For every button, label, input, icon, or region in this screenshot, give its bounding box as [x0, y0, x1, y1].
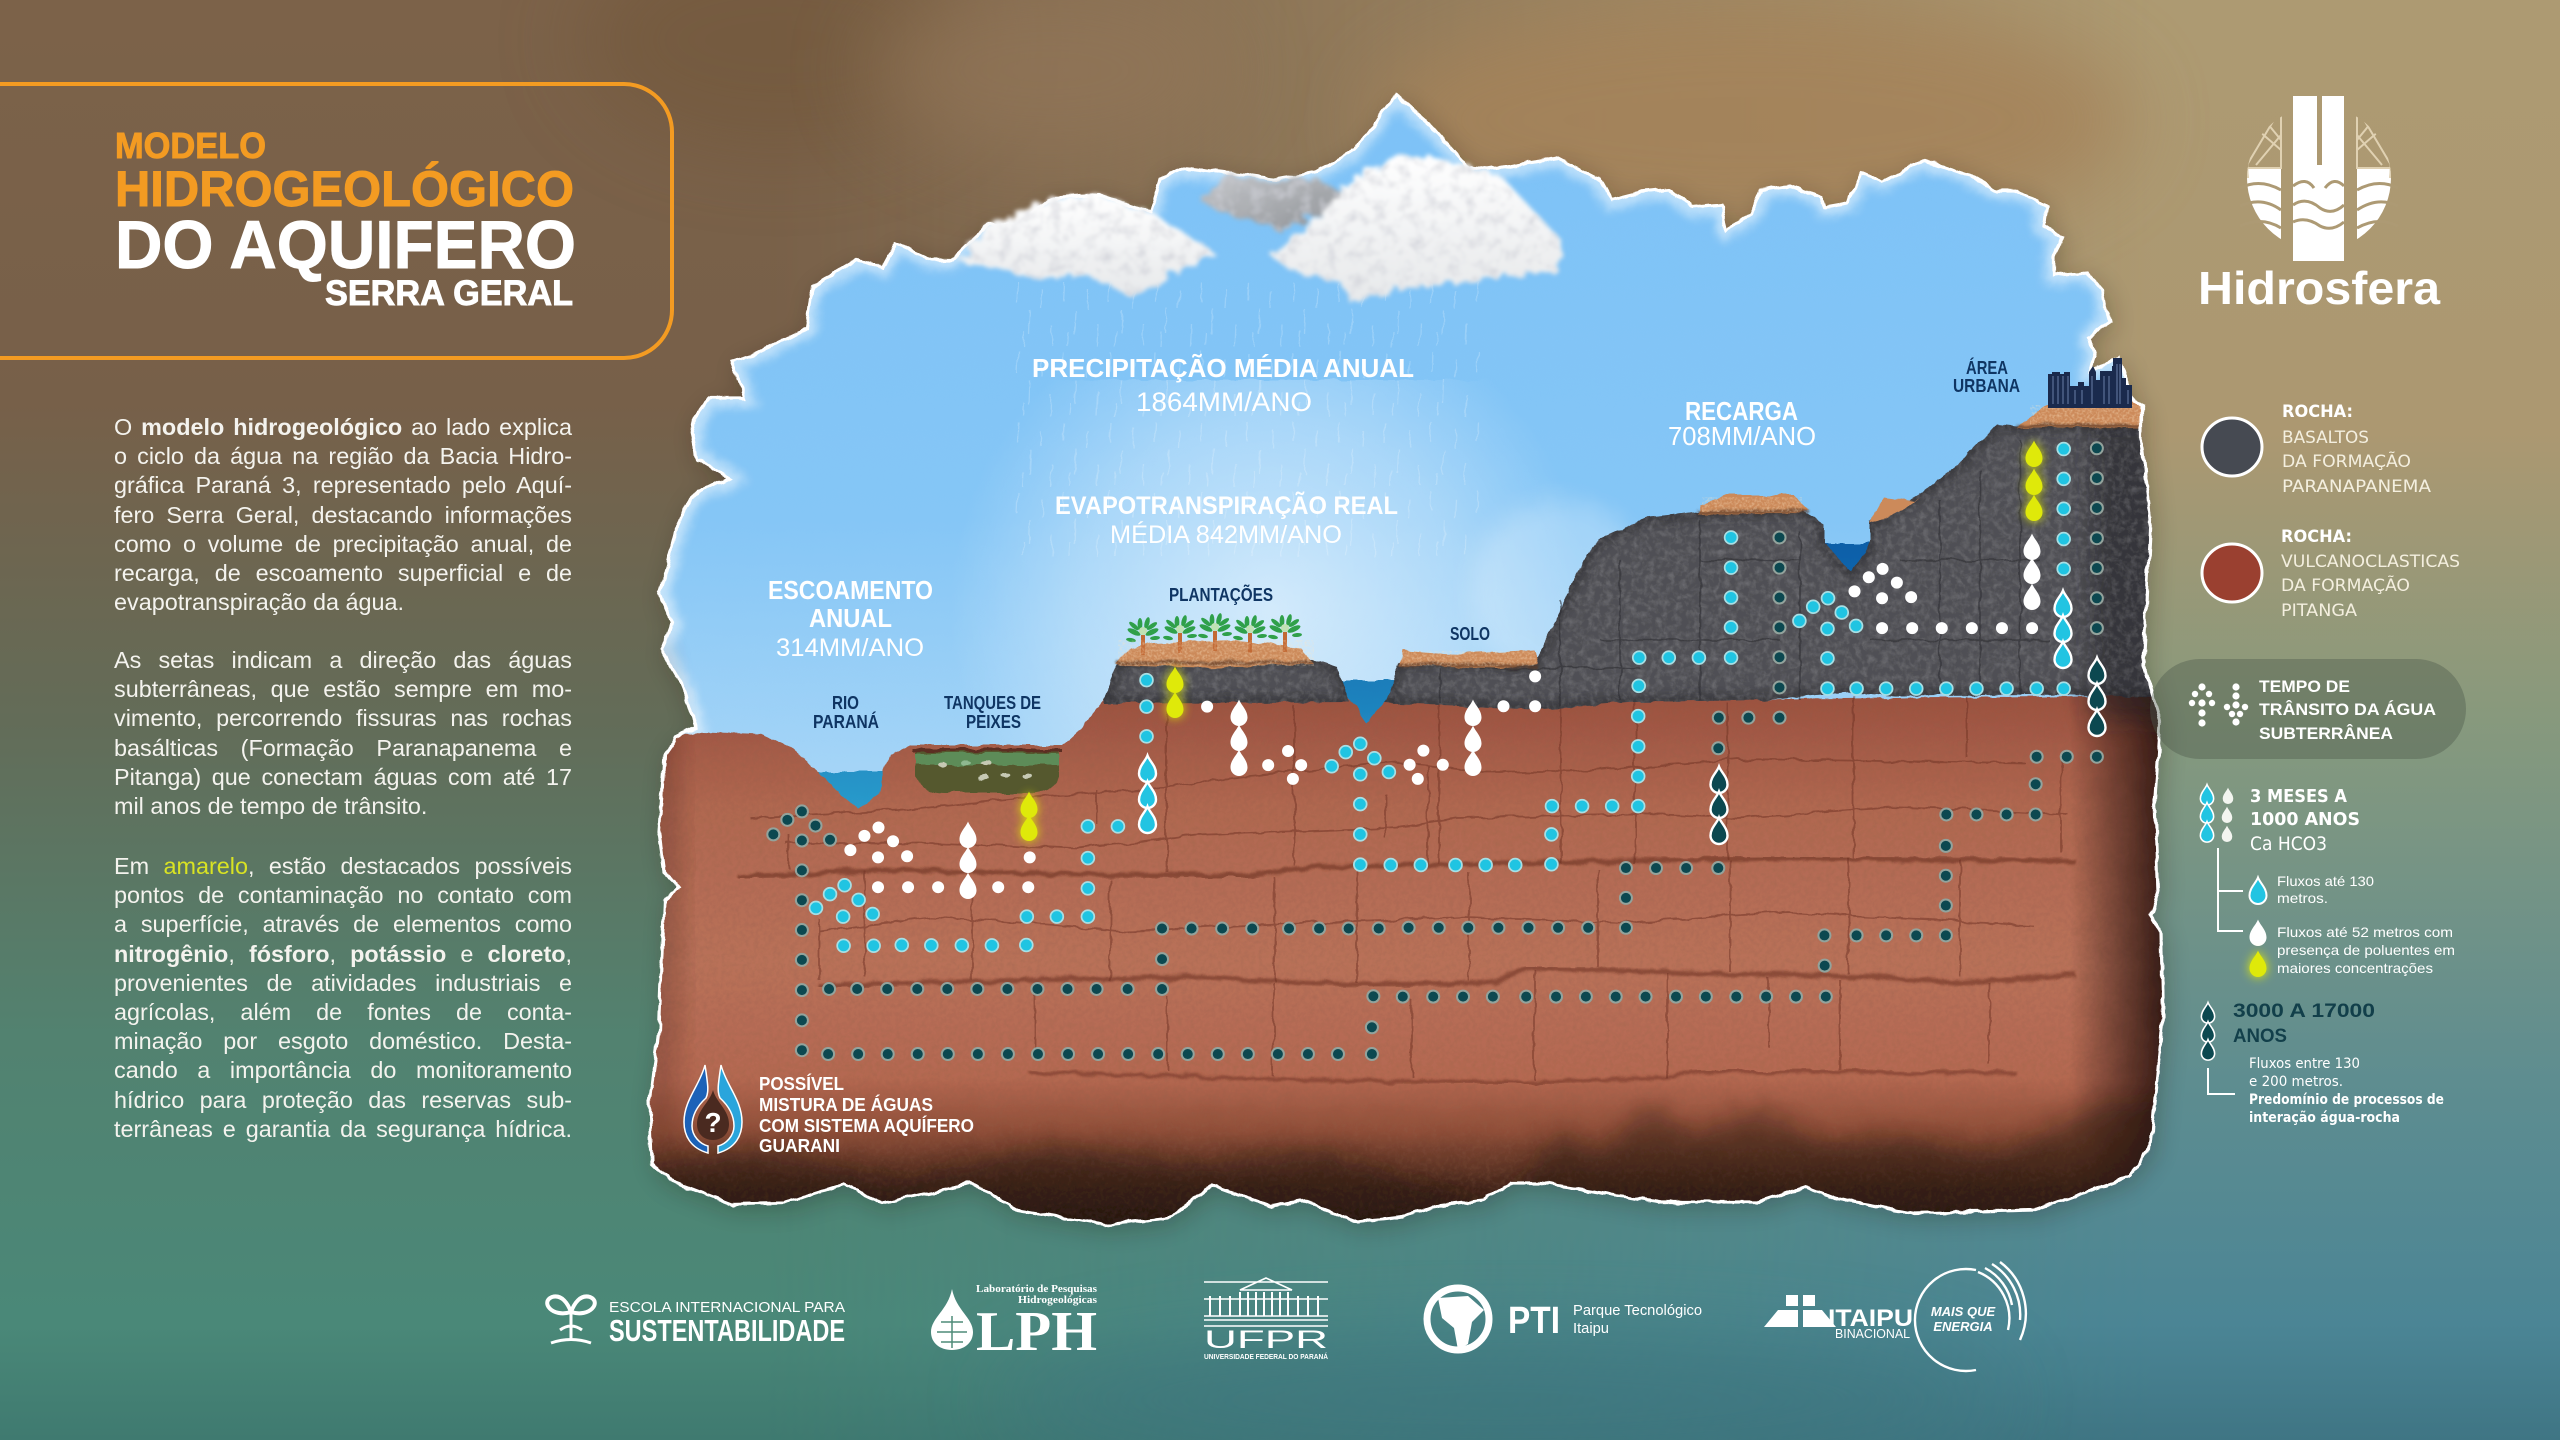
label: urban area: URBANA [1953, 376, 2020, 396]
note text: Fluxos entre 130 [2249, 1056, 2360, 1072]
legend text: volcaniclastic: DA FORMAÇÃO [2281, 574, 2410, 596]
logo: PTI: Itaipu [1573, 1320, 1609, 1337]
heading text: ANOS [2233, 1026, 2287, 1047]
text block: intro paragraph [114, 414, 572, 615]
text block: contamination paragraph: nitrogênio, fósforo, potássio e cloreto, [114, 941, 572, 967]
swatch: basalt [2202, 418, 2262, 476]
groundwater flow dots [773, 448, 2097, 1054]
text block: contamination paragraph: cando a importância do monitoramento [114, 1057, 572, 1083]
logo: Escola Internacional para Sustentabilidade [547, 1296, 845, 1348]
sky [660, 97, 2124, 774]
flows to 130 m: Fluxos até 130 [2277, 873, 2374, 889]
text block: contamination paragraph: minação por esgoto doméstico. Desta- [114, 1028, 572, 1054]
text block: intro paragraph: gráfica Paraná 3, representado pelo Aquí- [114, 472, 572, 498]
icon: cyan and white drops [2200, 784, 2233, 842]
text block: contamination paragraph: agrícolas, além de fontes de conta- [114, 999, 572, 1025]
wordmark: Hidrosfera [2198, 262, 2440, 314]
note text: interação água-rocha [2249, 1110, 2400, 1126]
text block: arrows paragraph: subterrâneas, que estão sempre em mo- [114, 676, 572, 702]
title [115, 125, 576, 313]
text block: arrows paragraph [114, 647, 572, 819]
heading text [2250, 786, 2360, 855]
text block: arrows paragraph: basálticas (Formação Paranapanema e [114, 735, 572, 761]
icon: blue split drop with question mark: ? [704, 1107, 722, 1138]
rivers [815, 543, 1880, 815]
legend text: volcaniclastic: PITANGA [2281, 601, 2357, 621]
label: evapotranspiration: EVAPOTRANSPIRAÇÃO REAL [1055, 490, 1398, 520]
label: Paraná river: PARANÁ [813, 711, 879, 732]
dark rock edges [2072, 694, 2162, 1184]
title: HIDROGEOLÓGICO [115, 161, 574, 217]
text block: intro paragraph: fero Serra Geral, destacando informações [114, 502, 572, 528]
logo: PTI: Parque Tecnológico [1573, 1302, 1702, 1319]
landscape: sky, rock layers and soil [620, 80, 2200, 1260]
footer logos [547, 1262, 2026, 1371]
note text: Predomínio de processos de [2249, 1092, 2444, 1108]
soil patches [1117, 400, 2145, 668]
heading text: Ca HCO3 [2250, 833, 2327, 855]
city skyline [2048, 358, 2132, 408]
logo: UFPR [1204, 1278, 1329, 1361]
label: Paraná river: RIO [832, 693, 859, 713]
label: urban area: ÁREA [1966, 357, 2008, 378]
flows to 130 m: metros. [2277, 890, 2328, 906]
red volcaniclastic rock [650, 695, 2162, 1225]
label: annual runoff: 314MM/ANO [776, 634, 924, 662]
callout text: COM SISTEMA AQUÍFERO [759, 1115, 974, 1136]
icon: blue split drop with question mark [684, 1065, 742, 1153]
legend: 3000 to 17000 years [2201, 1001, 2444, 1126]
logo: Escola Internacional para Sustentabilidade: SUSTENTABILIDADE [609, 1313, 845, 1348]
text block: arrows paragraph: mil anos de tempo de trânsito. [114, 793, 427, 819]
logo: Itaipu Binacional, mais que energia [1764, 1262, 2026, 1371]
label: soil: SOLO [1450, 624, 1490, 644]
label: precipitation [1032, 353, 1414, 417]
pill text: TRÂNSITO DA ÁGUA [2259, 700, 2436, 719]
text block: arrows paragraph: As setas indicam a direção das águas [114, 647, 572, 673]
dark drops [1710, 658, 2106, 844]
title: MODELO [115, 125, 266, 166]
strata and fractures [737, 696, 2075, 1083]
yellow contamination glow drops [1020, 440, 2042, 841]
heading text: 3000 A 17000 [2233, 1001, 2375, 1022]
text block: intro paragraph: O modelo hidrogeológico ao lado explica [114, 414, 572, 440]
legend text: basalt: PARANAPANEMA [2282, 477, 2431, 497]
label: plantations: PLANTAÇÕES [1169, 584, 1273, 605]
white drops [960, 534, 2040, 899]
text block: intro paragraph: recarga, de escoamento superficial e de [114, 560, 572, 586]
text block: arrows paragraph: vimento, percorrendo fissuras nas rochas [114, 705, 572, 731]
text block: intro paragraph: evapotranspiração da água. [114, 589, 404, 615]
panel: title box [0, 84, 672, 358]
logo: LPH [931, 1283, 1098, 1363]
heading text: 3 MESES A [2250, 786, 2347, 807]
map drop shadow [654, 101, 2167, 1231]
flows to 52 m with pollutants: maiores concentrações [2277, 960, 2433, 976]
label: annual runoff [768, 575, 933, 662]
flows to 52 m with pollutants: presença de poluentes em [2277, 942, 2455, 958]
legend text: basalt: BASALTOS [2282, 428, 2369, 448]
logo: Itaipu Binacional, mais que energia: BINACIONAL [1835, 1326, 1910, 1341]
label: recharge: RECARGA [1685, 396, 1798, 426]
logo: UFPR: UFPR [1204, 1326, 1328, 1354]
title: DO AQUIFERO [115, 207, 576, 283]
text block: contamination paragraph: hídrico para proteção das reservas sub- [114, 1087, 572, 1113]
panel: aquifer cross-section map [620, 80, 2200, 1260]
callout text [759, 1073, 974, 1156]
logo: Itaipu Binacional, mais que energia: MAIS QUE [1931, 1304, 1995, 1319]
cyan shallow-water dots [816, 449, 2064, 946]
fish tank [913, 750, 1062, 793]
text block: contamination paragraph: a superfície, através de elementos como [114, 911, 572, 937]
label: annual runoff: ESCOAMENTO [768, 575, 933, 605]
legend text: volcaniclastic: VULCANOCLASTICAS [2281, 552, 2460, 572]
dark old-water dots [773, 448, 2097, 1054]
basalt rock [1100, 420, 2200, 720]
label: recharge: 708MM/ANO [1668, 421, 1816, 451]
logo: LPH: LPH [976, 1301, 1097, 1363]
label: recharge [1668, 396, 1816, 451]
logo: PTI [1427, 1288, 1702, 1350]
logo: Itaipu Binacional, mais que energia: ENERGIA [1933, 1319, 1993, 1334]
title: SERRA GERAL [325, 274, 573, 313]
text block: contamination paragraph: Em amarelo, estão destacados possíveis [114, 853, 572, 879]
pill text: SUBTERRÂNEA [2259, 724, 2393, 743]
text block: intro paragraph: como o volume de precipitação anual, de [114, 531, 572, 557]
flows to 130 m [2250, 873, 2374, 906]
label: precipitation: 1864MM/ANO [1136, 387, 1312, 417]
heading text: 1000 ANOS [2250, 809, 2360, 830]
soil texture [1118, 405, 2140, 666]
swatch: volcaniclastic [2202, 544, 2262, 602]
label: evapotranspiration [1055, 490, 1398, 549]
text block: contamination paragraph: provenientes de atividades industriais e [114, 970, 572, 996]
flows to 52 m with pollutants: Fluxos até 52 metros com [2277, 924, 2453, 940]
legend text: basalt: DA FORMAÇÃO [2282, 450, 2411, 472]
legend: 3 months to 1000 years [2200, 784, 2455, 977]
icon: dark drops [2201, 1002, 2215, 1060]
plantations [1126, 613, 1302, 655]
icon: up and down flow dot arrows [2189, 683, 2248, 727]
logo: Itaipu Binacional, mais que energia: ITAIPU [1828, 1305, 1913, 1332]
text block: contamination paragraph: pontos de contaminação no contato com [114, 882, 572, 908]
map white border [650, 95, 2163, 1225]
label: Paraná river [813, 693, 879, 732]
note text: e 200 metros. [2249, 1074, 2343, 1090]
label: fish tanks: TANQUES DE [944, 693, 1041, 713]
pill text: TEMPO DE [2259, 677, 2350, 696]
label: precipitation: PRECIPITAÇÃO MÉDIA ANUAL [1032, 353, 1414, 383]
callout: possible mixing with Guarani aquifer [684, 1065, 974, 1156]
connector lines [2218, 848, 2243, 931]
legend text: volcaniclastic [2281, 527, 2460, 621]
pill text [2259, 677, 2436, 743]
clouds [959, 155, 1562, 304]
icon: Hidrosfera emblem [2240, 96, 2398, 261]
logo: Escola Internacional para Sustentabilidade: ESCOLA INTERNACIONAL PARA [609, 1299, 845, 1316]
callout text: POSSÍVEL [759, 1073, 844, 1094]
callout text: GUARANI [759, 1136, 840, 1156]
label: evapotranspiration: MÉDIA 842MM/ANO [1110, 520, 1342, 549]
white dots [850, 569, 2032, 887]
text block: contamination paragraph [114, 853, 572, 1142]
logo: UFPR: UNIVERSIDADE FEDERAL DO PARANÁ [1204, 1352, 1329, 1361]
flows to 52 m with pollutants [2250, 920, 2455, 977]
logo: PTI: PTI [1508, 1300, 1560, 1342]
label: annual runoff: ANUAL [809, 603, 892, 633]
label: fish tanks [944, 693, 1041, 732]
note text [2249, 1056, 2444, 1126]
teardrop flow markers [960, 440, 2106, 899]
logo: LPH: Laboratório de Pesquisas [976, 1283, 1098, 1295]
callout text: MISTURA DE ÁGUAS [759, 1094, 933, 1115]
legend: transit time pill [2150, 659, 2466, 759]
label: urban area [1953, 357, 2020, 396]
legend text: volcaniclastic: ROCHA: [2281, 527, 2352, 547]
connector line [2208, 1068, 2235, 1094]
logo: LPH: Hidrogeológicas [1018, 1294, 1098, 1306]
cyan drops [1139, 590, 2072, 833]
heading text [2233, 1001, 2375, 1047]
logo: Hidrosfera [2198, 96, 2440, 314]
legend text: basalt [2282, 402, 2431, 497]
legend text: basalt: ROCHA: [2282, 402, 2353, 422]
label: fish tanks: PEIXES [966, 712, 1021, 732]
legend: rock types [2202, 402, 2460, 621]
map labels [768, 353, 2020, 732]
text block: intro paragraph: o ciclo da água na região da Bacia Hidro- [114, 443, 572, 469]
text block: contamination paragraph: terrâneas e garantia da segurança hídrica. [114, 1116, 572, 1142]
text block: arrows paragraph: Pitanga) que conectam águas com até 17 [114, 764, 572, 790]
